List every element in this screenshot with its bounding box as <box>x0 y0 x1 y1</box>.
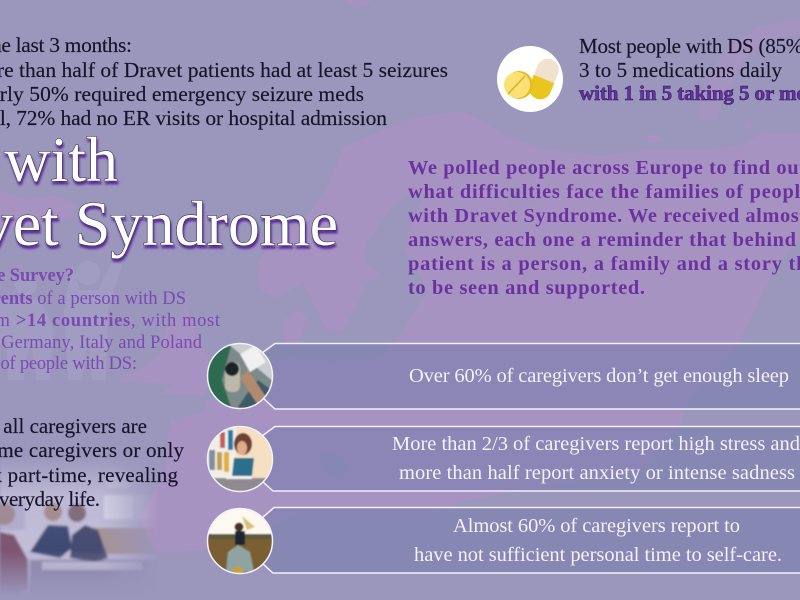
map: sea and lake patches <box>280 182 545 480</box>
label: self-care statistic <box>414 515 782 566</box>
text: medications: 3 to 5 medications daily <box>579 58 782 82</box>
panel: self-care <box>206 507 800 577</box>
icon: photo of stressed woman <box>208 427 272 491</box>
text: who answered the survey <box>0 266 221 374</box>
icon: photo of parent and child with kite <box>208 509 272 573</box>
label: self-care statistic: Almost 60% of caregivers report to <box>453 515 740 537</box>
photo: caregivers meeting around a table <box>0 466 152 590</box>
icon: photo of coffee and book <box>208 344 272 408</box>
text: medications <box>579 34 800 105</box>
label: stress statistic <box>392 433 800 484</box>
label: self-care statistic: have not sufficient personal time to self-care. <box>414 544 782 566</box>
label: stress statistic: more than half report anxiety or intense sadness <box>399 462 795 484</box>
text: seizures in the last 3 months <box>0 33 448 130</box>
text: caregiver employment <box>0 414 184 511</box>
label: sleep statistic: Over 60% of caregivers don’t get enough sleep <box>409 365 789 387</box>
title <box>0 124 338 259</box>
panel: stress <box>206 425 800 494</box>
icon: medication pills <box>497 46 563 112</box>
icon: faint people behind survey text <box>0 261 122 380</box>
text: survey introduction: to be seen and supported. <box>408 277 645 299</box>
panel: sleep <box>206 342 800 410</box>
label: stress statistic: More than 2/3 of caregivers report high stress and <box>392 433 800 455</box>
text: survey introduction: with Dravet Syndrome. We received almost <box>408 205 800 227</box>
text: survey introduction: what difficulties face the families of people <box>408 181 800 203</box>
text: survey introduction <box>408 157 800 299</box>
text: survey introduction: We polled people across Europe to find out <box>408 157 800 179</box>
